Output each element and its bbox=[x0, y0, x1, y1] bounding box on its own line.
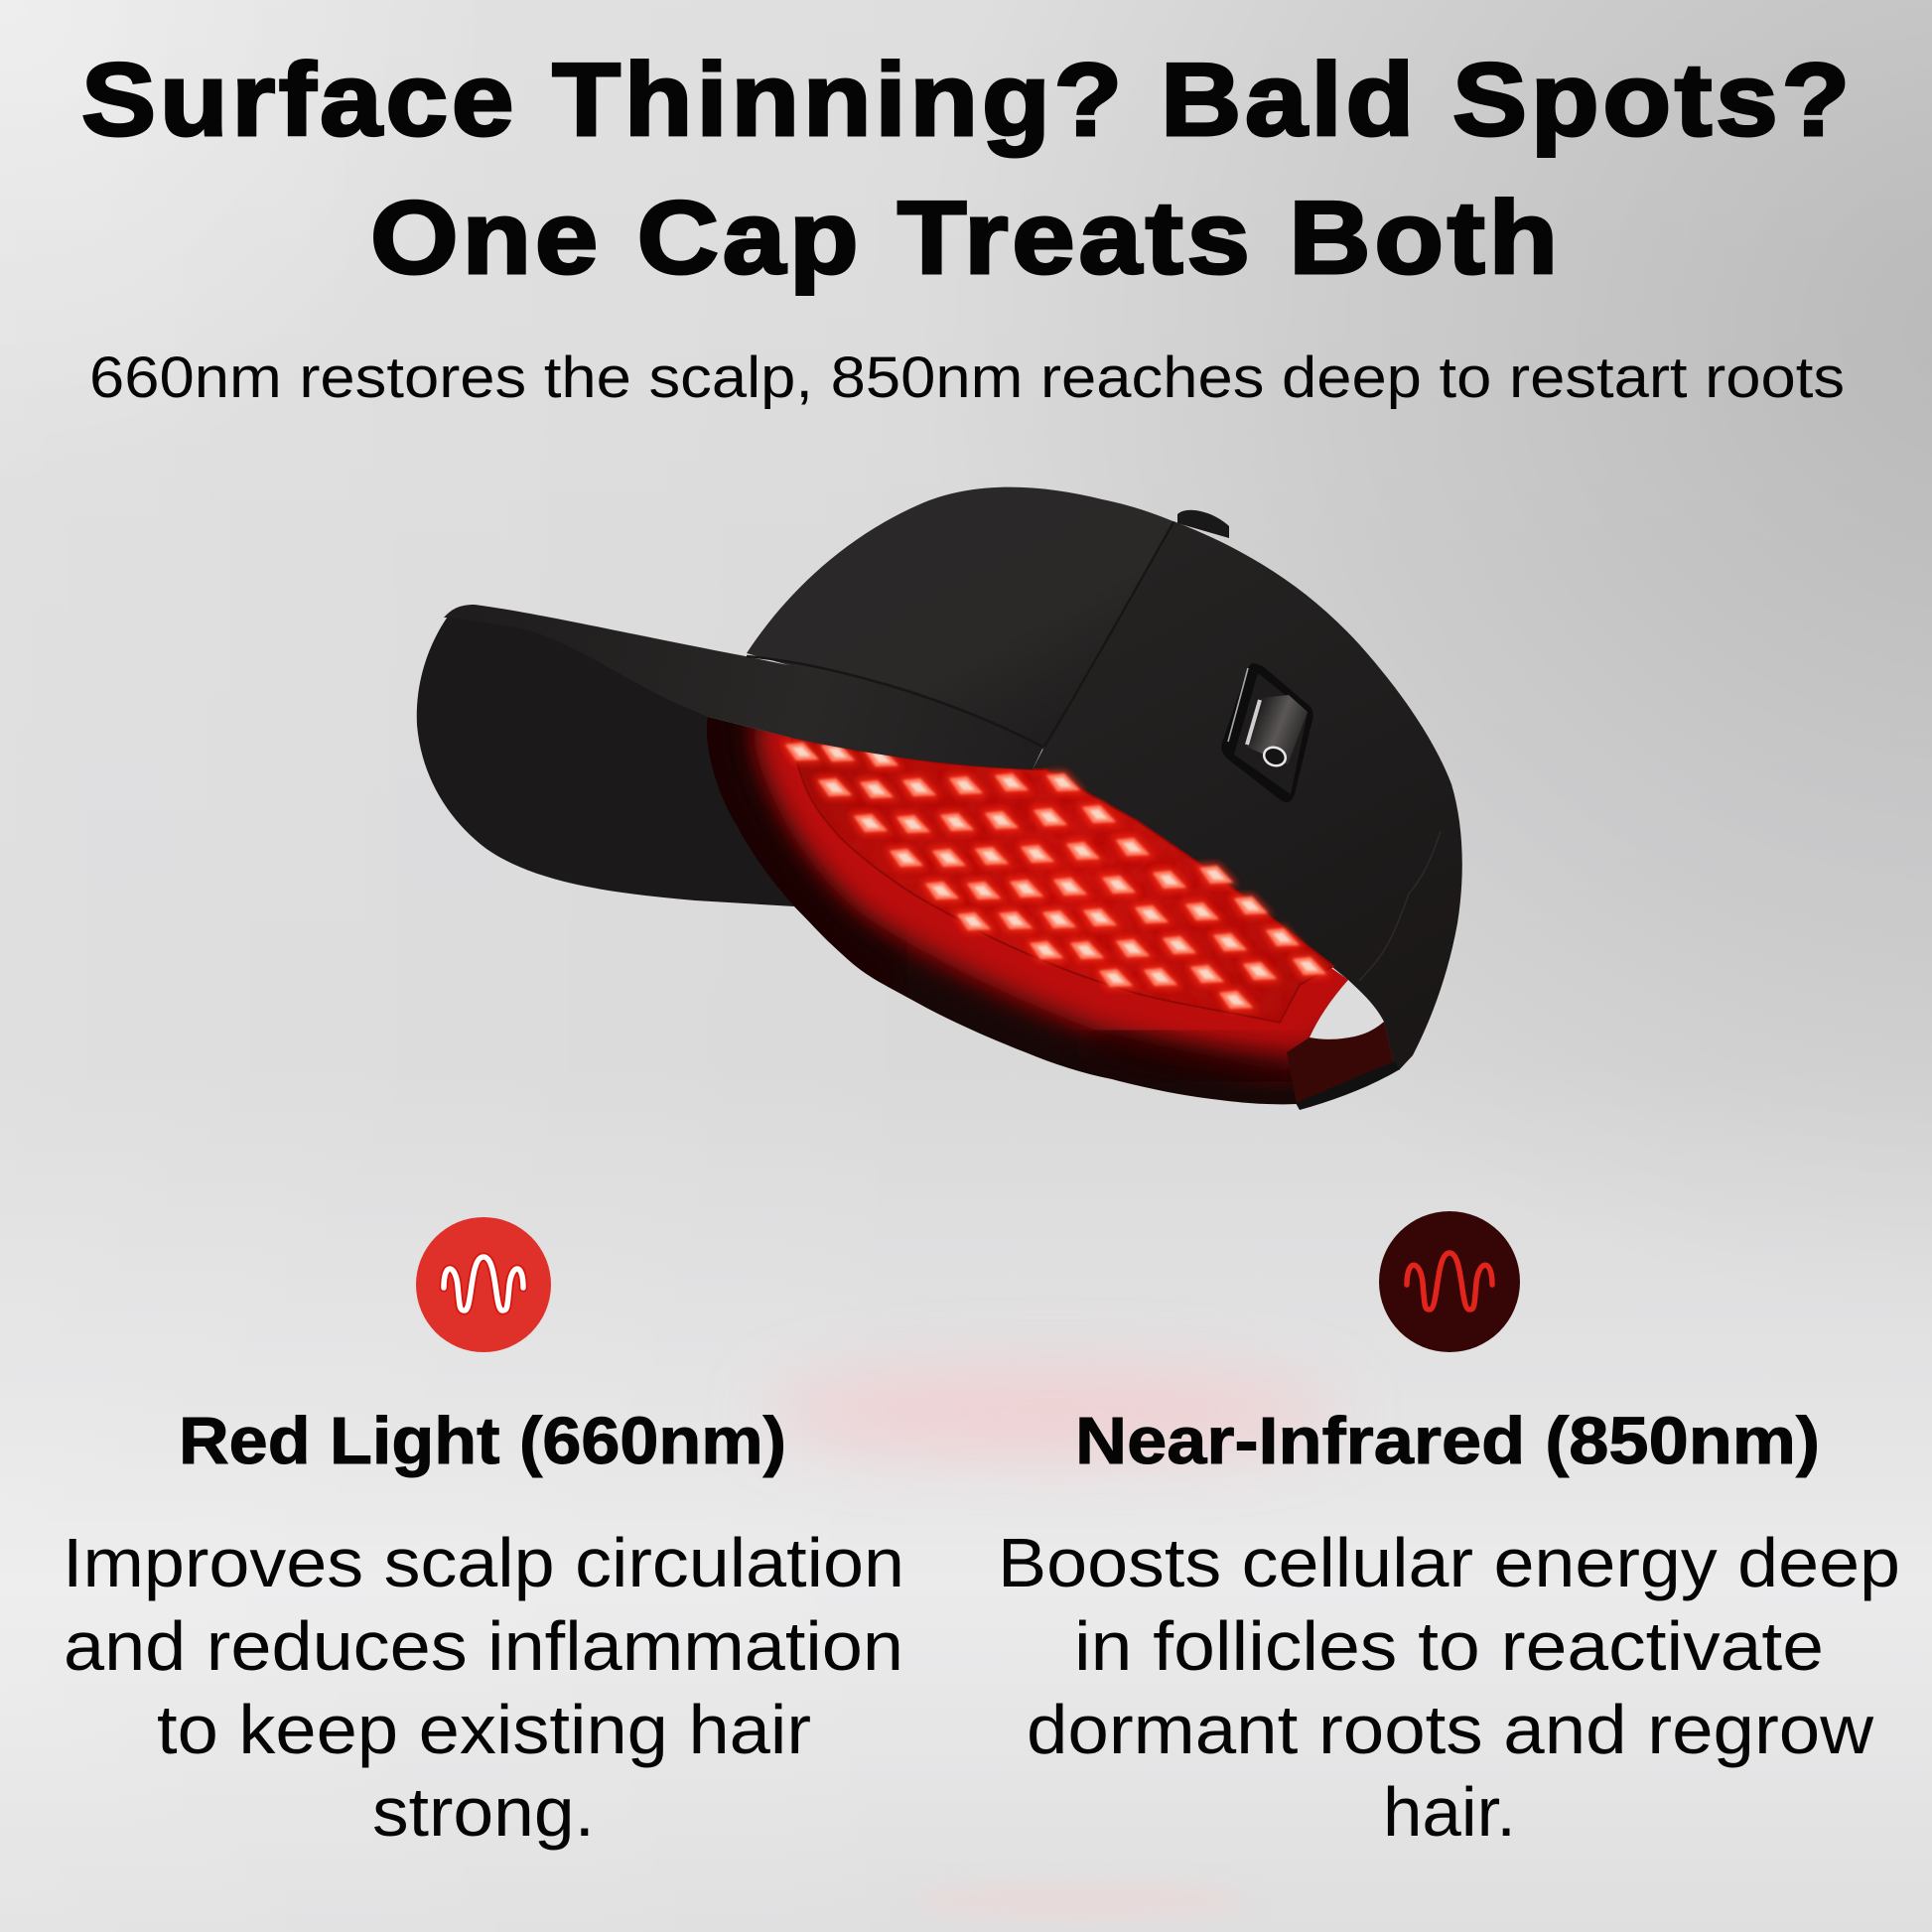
icon: red light wave bbox=[416, 1217, 551, 1352]
inner red band bbox=[707, 717, 1394, 1104]
side panel stitching bbox=[1359, 831, 1441, 981]
heading: Red Light (660nm) bbox=[179, 1404, 786, 1478]
panel: red light 660nm bbox=[63, 1217, 904, 1851]
strap clip bbox=[1296, 1061, 1400, 1110]
description: dormant roots and regrow bbox=[1027, 1691, 1873, 1768]
LED array bbox=[781, 741, 1331, 1011]
strap opening bbox=[1310, 980, 1384, 1039]
description bbox=[63, 1524, 904, 1851]
top button bbox=[1177, 510, 1229, 538]
title: One Cap Treats Both bbox=[370, 181, 1562, 296]
description: Boosts cellular energy deep bbox=[998, 1524, 1900, 1601]
icon: near-infrared wave bbox=[1379, 1211, 1520, 1352]
description: hair. bbox=[1383, 1773, 1516, 1851]
control module bbox=[1221, 663, 1313, 802]
description: and reduces inflammation bbox=[64, 1607, 903, 1685]
LED panel bbox=[791, 738, 1333, 1023]
panel: near-infrared 850nm bbox=[998, 1211, 1900, 1851]
description bbox=[998, 1524, 1900, 1851]
heading: Near-Infrared (850nm) bbox=[1075, 1404, 1820, 1478]
title: Surface Thinning? Bald Spots? bbox=[81, 43, 1854, 158]
brim underside bbox=[417, 606, 794, 906]
description: Improves scalp circulation bbox=[63, 1524, 904, 1601]
strap interior bbox=[1287, 1022, 1394, 1104]
crown side panel bbox=[1033, 521, 1462, 1070]
title bbox=[81, 43, 1854, 296]
subtitle: 660nm restores the scalp, 850nm reaches deep to restart roots bbox=[89, 345, 1845, 410]
cap product illustration bbox=[417, 487, 1462, 1122]
description: to keep existing hair bbox=[157, 1691, 811, 1768]
brim top surface bbox=[444, 605, 1044, 769]
description: in follicles to reactivate bbox=[1074, 1607, 1824, 1685]
crown seam lines bbox=[747, 522, 1173, 747]
crown front panel bbox=[747, 487, 1175, 750]
description: strong. bbox=[372, 1773, 595, 1851]
